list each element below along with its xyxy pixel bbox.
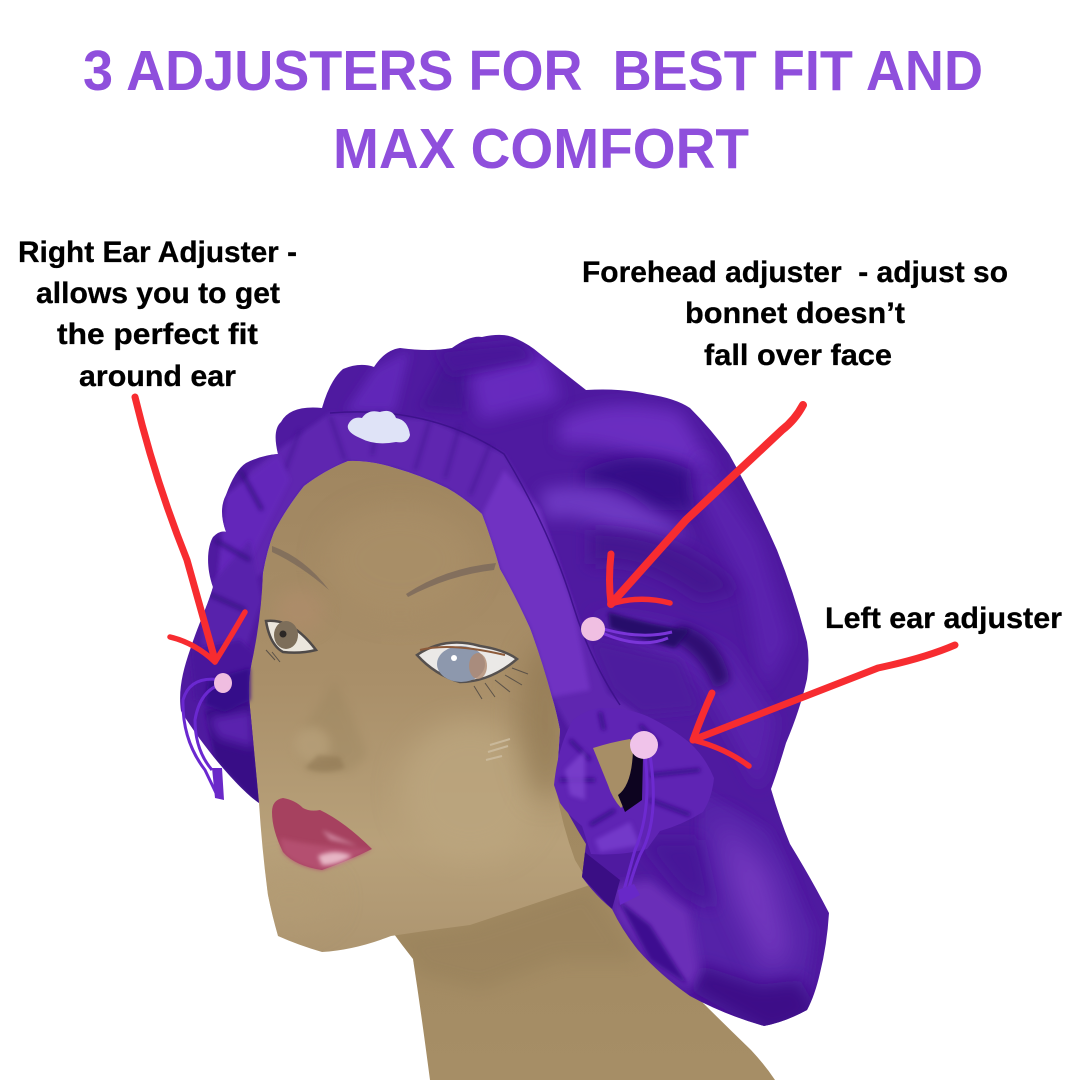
title: MAX COMFORT — [333, 117, 749, 181]
label: right ear adjuster: allows you to get — [36, 277, 280, 310]
gathered band along forehead — [250, 414, 635, 728]
arrow: right ear — [135, 397, 245, 662]
left ear adjuster — [554, 708, 714, 905]
label: right ear adjuster: the perfect fit — [57, 318, 258, 351]
lips — [272, 798, 372, 870]
label: forehead adjuster: Forehead adjuster - adjust so — [582, 256, 1008, 289]
label: forehead adjuster — [582, 256, 1008, 372]
right eyebrow — [406, 563, 496, 597]
right eye — [417, 643, 517, 682]
arrow: forehead — [610, 405, 803, 604]
mannequin head and neck — [245, 461, 800, 1080]
label: left ear adjuster: Left ear adjuster — [825, 602, 1062, 635]
left eye — [266, 621, 316, 653]
ring hole shadow — [618, 750, 643, 812]
face — [249, 461, 590, 952]
neck — [395, 792, 775, 1080]
pink bead — [630, 731, 658, 759]
ring hole — [593, 739, 643, 808]
band gathers — [286, 417, 490, 494]
title: 3 ADJUSTERS FOR BEST FIT AND — [83, 39, 983, 103]
ring gathers — [560, 712, 700, 825]
label: forehead adjuster: fall over face — [704, 339, 892, 372]
main satin folds — [540, 405, 790, 790]
arrow: left ear — [693, 645, 955, 766]
eyelashes — [266, 650, 528, 699]
title — [83, 39, 983, 181]
left eyebrow — [272, 546, 329, 590]
label: right ear adjuster: around ear — [79, 360, 236, 393]
label: right ear adjuster: Right Ear Adjuster - — [18, 236, 297, 269]
band seam — [330, 412, 620, 705]
cords and knot — [624, 755, 653, 892]
crown pleats — [345, 342, 560, 420]
left ruffles — [190, 454, 290, 700]
cloud logo patch — [348, 411, 410, 443]
pink bead — [581, 617, 605, 641]
cord end — [212, 768, 224, 800]
label: forehead adjuster: bonnet doesn’t — [685, 297, 905, 330]
forehead adjuster — [581, 612, 690, 648]
label: right ear adjuster — [18, 236, 297, 393]
right ear adjuster — [183, 668, 250, 800]
gathered ring — [205, 668, 250, 712]
right ear lower fabric — [205, 700, 259, 803]
bonnet tail — [692, 805, 816, 1026]
cords — [183, 679, 222, 795]
cord — [600, 628, 672, 643]
forehead and cheek shading — [265, 650, 560, 930]
cheek mark — [486, 739, 510, 760]
fold opening — [608, 612, 690, 648]
scrunched ear ring — [554, 708, 714, 854]
bonnet base shape — [180, 335, 829, 1026]
satin bonnet — [180, 335, 829, 1035]
pink bead — [214, 673, 232, 693]
tail pocket — [582, 840, 715, 990]
nose — [294, 680, 368, 772]
